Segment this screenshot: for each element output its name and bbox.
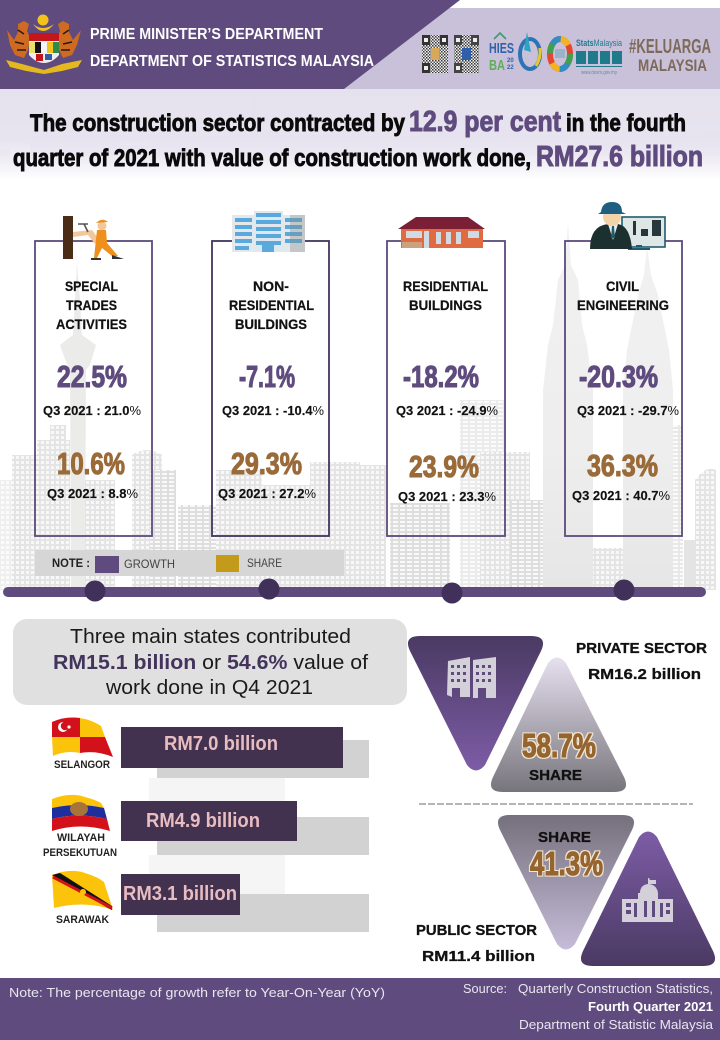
panel: civil engineering [565,202,682,536]
bar: Selangor: RM7.0 billion [164,733,278,755]
label [229,278,314,332]
growth previous quarter: Q3 2021 : -10.4% [222,403,324,418]
share previous quarter: Q3 2021 : 23.3% [398,489,496,504]
icon: engineer with monitor [590,202,665,250]
share value: 10.6% [57,446,125,481]
logo: HIES BA [489,33,514,74]
logo: HIES BA: HIES [489,40,514,57]
icon: carpenter [63,216,124,260]
bar chart: states [121,727,369,932]
flag: Wilayah Persekutuan [43,795,117,859]
label: BUILDINGS [409,297,482,313]
flag: Wilayah Persekutuan: WILAYAH [57,832,105,844]
growth value: -18.2% [403,359,479,394]
icon: QR code one [422,35,448,73]
label: BUILDINGS [235,316,307,332]
growth value: -20.3% [579,359,658,394]
icon: house [398,217,485,248]
main title: quarter of 2021 with value of construction work done, [13,145,531,172]
private sector label [576,640,707,683]
flag: Selangor [52,718,113,771]
right tiger [57,21,81,58]
panel: non-residential buildings [212,211,329,536]
title background band [0,89,720,181]
callout: three main states: Three main states contributed [70,626,351,648]
public sector label: RM11.4 billion [422,948,535,965]
header purple banner [0,0,460,89]
callout: three main states: RM15.1 billion or 54.6% value of [53,652,368,674]
bar: Selangor [121,727,343,768]
panel: special trades activities [35,216,152,536]
growth value: 22.5% [57,359,127,394]
share previous quarter: Q3 2021 : 8.8% [47,486,138,501]
share value: 29.3% [231,446,302,481]
icon: office buildings [232,211,305,252]
logo: SDG wheel [550,39,570,69]
public sector panel [416,815,715,966]
label [577,278,669,313]
footer source: Fourth Quarter 2021 [588,999,713,1014]
flag: Wilayah Persekutuan: PERSEKUTUAN [43,847,117,859]
flag: Selangor: SELANGOR [54,759,110,771]
icon: QR code two [454,35,479,73]
main title: The construction sector contracted by [30,110,406,137]
left tiger [7,21,30,58]
logo: StatsMalaysia social [576,38,622,76]
label: RESIDENTIAL [229,297,314,313]
panel: residential buildings [387,217,505,536]
triangle with share: SHARE [529,767,582,784]
share previous quarter: Q3 2021 : 40.7% [572,488,670,503]
logo: StatsMalaysia social: StatsMalaysia [576,38,622,48]
footer source: Department of Statistic Malaysia [519,1017,714,1032]
main title: 12.9 per cent [409,106,561,138]
flag: Sarawak [52,871,113,926]
triangle with share [498,815,634,950]
logo: StatsMalaysia social: www.dosm.gov.my [581,70,617,76]
share previous quarter: Q3 2021 : 27.2% [218,486,316,501]
triangle with share [491,658,626,792]
triangle with share: SHARE [538,829,591,846]
label: NON- [253,278,289,294]
logo: Keluarga Malaysia [629,36,711,75]
share value: 23.9% [409,449,479,484]
label: TRADES [66,297,117,313]
growth previous quarter: Q3 2021 : -24.9% [396,403,498,418]
legend: SHARE [247,556,282,570]
private sector panel [408,636,707,792]
footer note: Note: The percentage of growth refer to Year-On-Year (YoY) [9,985,385,1000]
main title: in the fourth [566,110,686,137]
Petronas twin towers [543,223,593,590]
label: RESIDENTIAL [403,278,488,294]
triangle with share: 41.3% [530,845,603,882]
KL tower [60,263,96,590]
bar: Wilayah Persekutuan [121,801,297,841]
background bars [149,740,369,932]
callout: three main states: work done in Q4 2021 [105,677,313,699]
header heading text: PRIME MINISTER’S DEPARTMENT [90,26,323,43]
private sector label: PRIVATE SECTOR [576,640,707,657]
growth previous quarter: Q3 2021 : -29.7% [577,403,679,418]
legend: NOTE : [52,558,90,570]
bar: Wilayah Persekutuan: RM4.9 billion [146,810,260,832]
growth previous quarter: Q3 2021 : 21.0% [43,403,141,418]
callout: three main states [13,619,407,705]
bar: Sarawak: RM3.1 billion [123,883,237,905]
label [56,278,127,332]
triangle with government building icon [581,832,715,966]
triangle with buildings icon [408,636,543,770]
header lavender strip [300,8,720,89]
timeline bar [3,578,706,604]
share value: 36.3% [587,448,658,483]
footer source: Quarterly Construction Statistics, [518,981,713,996]
header [0,0,720,89]
public sector label [416,922,537,965]
label: ACTIVITIES [56,316,127,332]
footer source [463,981,714,1032]
footer source: Source: [463,981,507,996]
icon: Malaysian coat of arms [6,14,82,74]
logo: HIES BA: 20 [507,58,514,64]
triangle with share: 58.7% [522,727,596,764]
main title [13,106,703,173]
growth value: -7.1% [239,359,295,394]
bar: Sarawak [121,874,240,915]
legend [35,550,344,576]
private sector label: RM16.2 billion [588,666,701,683]
label: SPECIAL [65,278,118,294]
public sector label: PUBLIC SECTOR [416,922,537,939]
footer [0,978,720,1040]
legend: GROWTH [124,557,175,571]
logo: census ring [520,32,540,69]
flag: Sarawak: SARAWAK [56,914,109,926]
header heading text [90,26,374,70]
logo: HIES BA: 22 [507,65,514,71]
logo: HIES BA: BA [489,57,505,74]
label: CIVIL [606,278,639,294]
background skyline [0,223,716,590]
label [403,278,488,313]
header heading text: DEPARTMENT OF STATISTICS MALAYSIA [90,53,374,70]
label: ENGINEERING [577,297,669,313]
